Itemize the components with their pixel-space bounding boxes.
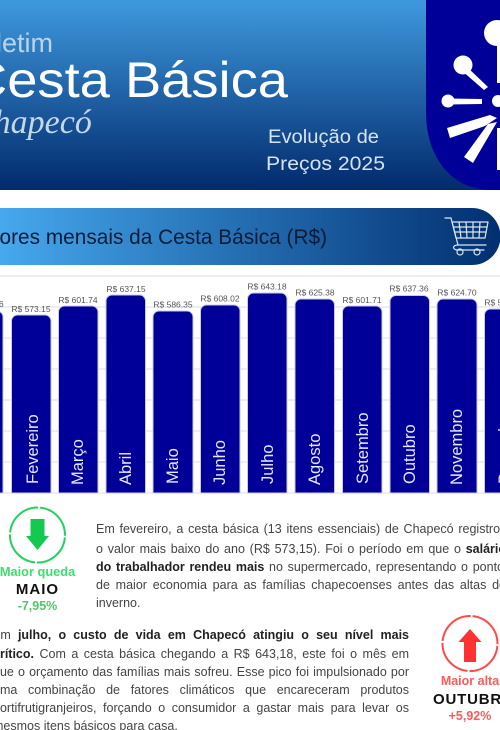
bar: Novembro (437, 299, 477, 493)
value labels: R$ 624.70 (437, 288, 477, 298)
icon: green down arrow in dashed circle (8, 505, 67, 565)
month labels: Abril (117, 452, 135, 485)
month labels: Fevereiro (24, 414, 42, 484)
header subtitle (266, 127, 385, 175)
text: Em julho, o custo de vida em Chapecó atingiu o seu nível mais (0, 628, 409, 642)
value labels: R$ 608.02 (200, 294, 240, 304)
title bar (0, 208, 500, 265)
bar chart (0, 276, 500, 493)
bar: Dezembro (484, 309, 500, 493)
stat: maior alta (433, 614, 500, 723)
month labels (24, 408, 500, 485)
text: uma combinação de fatores climáticos que encareceram produtos (0, 683, 409, 697)
bar: Outubro (390, 296, 430, 493)
bar: Agosto (295, 299, 334, 493)
logo shield (426, 0, 500, 190)
month labels: Agosto (306, 434, 324, 485)
stat: maior queda: MAIO (16, 581, 59, 598)
bar: Setembro (342, 306, 382, 493)
header subtitle: Preços 2025 (266, 154, 385, 175)
month labels: Outubro (401, 424, 419, 484)
value labels: R$ 586.35 (153, 300, 193, 310)
bar: Abril (106, 295, 146, 493)
icon: shopping cart (445, 218, 488, 255)
value labels: R$ 637.36 (389, 284, 429, 294)
text: do trabalhador rendeu mais no supermercado, representando o ponto (96, 560, 500, 574)
month labels: Junho (211, 440, 229, 485)
header subtitle: Evolução de (268, 127, 379, 148)
text: de maior economia para as famílias chapecoenses antes das altas do (96, 578, 500, 592)
value labels (0, 282, 500, 314)
paragraph: fevereiro (96, 522, 500, 610)
text: Em fevereiro, a cesta básica (13 itens essenciais) de Chapecó registrou (96, 522, 500, 536)
value labels: R$ 601.74 (58, 295, 98, 305)
bar: Março (58, 306, 98, 493)
icon: red up arrow in dashed circle (440, 614, 500, 673)
bar: Maio (153, 311, 193, 493)
text: inverno. (96, 596, 140, 610)
stat: maior alta: +5,92% (449, 709, 491, 723)
value labels: R$ 601.71 (342, 295, 382, 305)
text: que o orçamento das famílias mais sofreu. Esse pico foi impulsionado por (0, 665, 409, 679)
header banner (0, 0, 500, 190)
value labels: R$ 625.38 (295, 288, 335, 298)
stat: maior queda (0, 505, 76, 613)
paragraph: julho (0, 628, 409, 730)
text: o valor mais baixo do ano (R$ 573,15). Foi o período em que o salário (96, 542, 500, 556)
month labels: Julho (259, 445, 277, 484)
value labels: R$ 637.15 (106, 284, 146, 294)
bar: Julho (248, 293, 287, 493)
value labels: R$ 573.15 (11, 304, 51, 314)
month labels: Maio (164, 448, 182, 484)
text: hortifrutigranjeiros, forçando o consumidor a gastar mais para levar os (0, 701, 409, 715)
stat: maior queda: Maior queda (0, 564, 76, 579)
value labels: R$ 643.18 (247, 282, 287, 292)
month labels: Novembro (448, 409, 466, 485)
month labels: Setembro (354, 412, 372, 484)
stat: maior queda: -7,95% (18, 599, 57, 613)
bar: Janeiro (0, 311, 3, 493)
bar: Junho (200, 305, 240, 493)
text: crítico. Com a cesta básica chegando a R$ 643,18, este foi o mês em (0, 647, 409, 661)
stat: maior alta: Maior alta (441, 674, 500, 688)
month labels: Março (69, 439, 87, 485)
bar: Fevereiro (12, 315, 51, 493)
